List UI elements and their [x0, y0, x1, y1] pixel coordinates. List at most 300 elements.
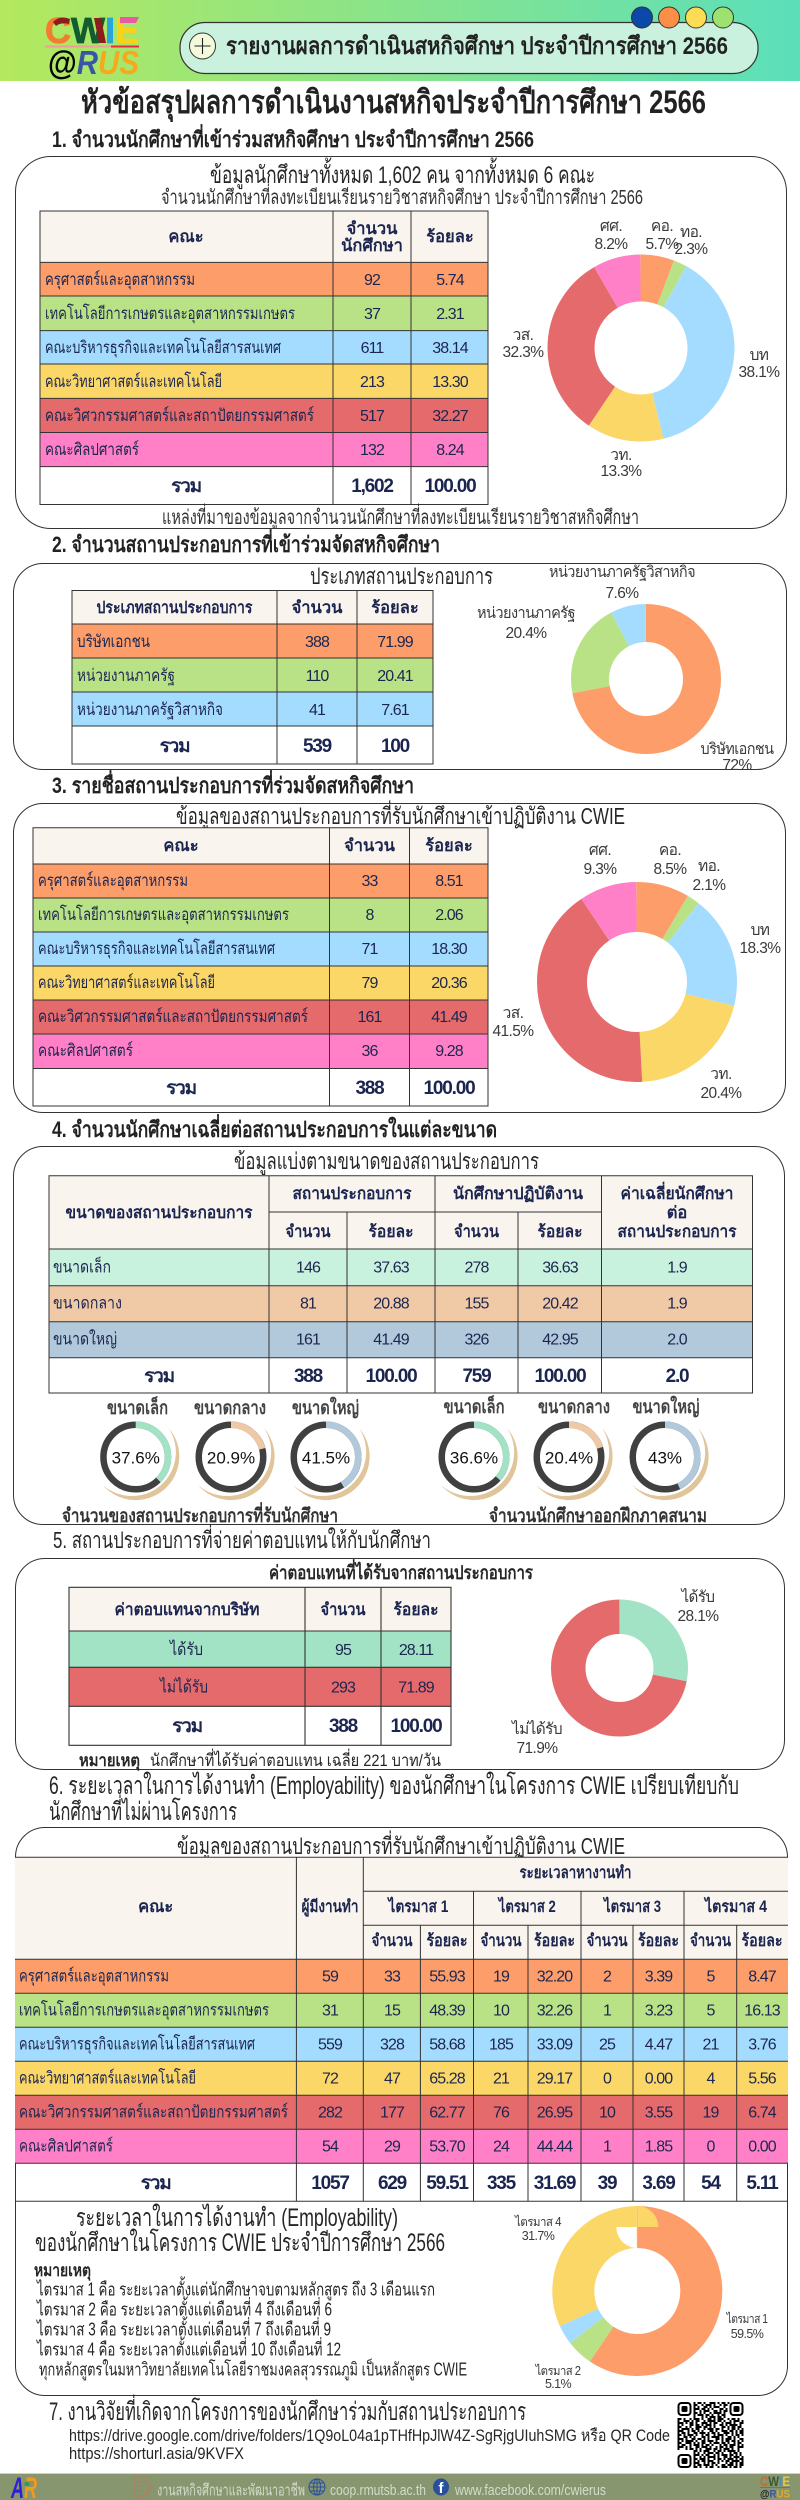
row: 155	[464, 1296, 489, 1312]
row: 132	[360, 442, 385, 459]
footer bar	[0, 2472, 800, 2500]
donut labels: ไตรมาส 4	[514, 2215, 562, 2229]
row: 3.76	[748, 2036, 777, 2054]
gauge: workplaces medium: ขนาดกลาง	[194, 1398, 266, 1419]
donut chart: workplaces by faculty	[562, 907, 712, 1057]
table: employability	[15, 1857, 788, 2201]
employability heading: ของนักศึกษาในโครงการ CWIE ประจำปีการศึกษา 2566	[35, 2228, 445, 2257]
table header: ร้อยละ	[394, 1601, 438, 1619]
table header: ร้อยละ	[534, 1932, 575, 1950]
table header	[96, 599, 419, 617]
row	[38, 938, 468, 959]
donut labels: 18.3%	[740, 940, 781, 957]
footer text: facebook: www.facebook.com/cwierus	[454, 2482, 606, 2499]
total row: 59.51	[426, 2173, 469, 2194]
donut labels: 38.1%	[739, 364, 780, 381]
row: 32.20	[537, 1968, 573, 1986]
heading 6	[49, 1771, 739, 1826]
employability heading	[35, 2203, 445, 2257]
row: 10	[599, 2104, 616, 2122]
gauge: students medium	[536, 1397, 613, 1500]
row: 3.39	[645, 1968, 673, 1986]
table header: จำนวน	[586, 1932, 628, 1950]
row: 282	[318, 2104, 343, 2122]
donut labels: วท.	[710, 1066, 732, 1083]
total row	[144, 1366, 689, 1387]
row: คณะวิทยาศาสตร์และเทคโนโลยี	[19, 2068, 196, 2088]
row: 388	[305, 634, 330, 651]
row: 36.63	[542, 1260, 579, 1276]
row: 55.93	[429, 1968, 466, 1986]
row: 72	[322, 2070, 339, 2088]
total row: 54	[701, 2173, 721, 2194]
row: 328	[380, 2036, 405, 2054]
row: 3.55	[645, 2104, 673, 2122]
table header: คณะ	[138, 1898, 173, 1916]
row: เทคโนโลยีการเกษตรและอุตสาหกรรมเกษตร	[45, 303, 295, 324]
row: 326	[464, 1332, 489, 1348]
table header: จำนวน	[344, 837, 396, 855]
table header: จำนวน	[480, 1932, 522, 1950]
row: 0.00	[645, 2070, 673, 2088]
table header: ขนาดของสถานประกอบการ	[66, 1204, 253, 1222]
row: คณะบริหารธุรกิจและเทคโนโลยีสารสนเทศ	[19, 2034, 255, 2054]
table header: จำนวน	[454, 1223, 500, 1241]
total row: 3.69	[642, 2173, 675, 2194]
row: คณะวิศวกรรมศาสตร์และสถาปัตยกรรมศาสตร์	[38, 1007, 308, 1026]
donut labels	[510, 1588, 719, 1757]
total row	[141, 2173, 779, 2194]
row: 20.88	[373, 1296, 410, 1312]
panel 4: students per workplace size	[13, 1146, 785, 1525]
row: 65.28	[429, 2070, 466, 2088]
row: ขนาดเล็ก	[53, 1256, 111, 1276]
donut labels: 59.5%	[731, 2327, 764, 2341]
gauge: workplaces large	[292, 1396, 370, 1500]
donut labels: 71.9%	[517, 1740, 558, 1757]
total row: 100	[381, 736, 410, 757]
panel 6: employability	[15, 1827, 788, 2396]
decorative dots	[632, 7, 734, 28]
row: 33	[384, 1968, 401, 1986]
table header	[66, 1181, 737, 1241]
row: 71	[362, 941, 378, 958]
row: 293	[331, 1680, 356, 1696]
table: workplace types	[72, 590, 433, 764]
row: 8.24	[436, 442, 465, 459]
table header: ผู้มีงานทำ	[302, 1897, 358, 1918]
total row: 100.00	[425, 476, 476, 497]
row: 13.30	[432, 374, 469, 391]
donut labels: ไม่ได้รับ	[510, 1720, 562, 1738]
row: ขนาดใหญ่	[53, 1328, 117, 1348]
row: 185	[489, 2036, 514, 2054]
row: 161	[358, 1009, 382, 1026]
row: 1	[603, 2138, 612, 2156]
donut labels: บท	[750, 347, 769, 364]
row: 21	[702, 2036, 719, 2054]
total row	[172, 1716, 442, 1737]
panel 1 heading: ข้อมูลนักศึกษาทั้งหมด 1,602 คน จากทั้งหมด 6 คณะ	[210, 157, 595, 190]
total row: 2.0	[666, 1366, 689, 1387]
row: 8.47	[748, 1968, 777, 1986]
row: คณะศิลปศาสตร์	[19, 2136, 113, 2156]
row: 42.95	[542, 1332, 579, 1348]
gauge: students medium: 20.4%	[545, 1448, 593, 1468]
total row: 100.00	[366, 1366, 417, 1387]
row: คณะวิทยาศาสตร์และเทคโนโลยี	[45, 371, 222, 391]
donut labels: 28.1%	[678, 1608, 719, 1625]
row: 37.63	[373, 1260, 410, 1276]
row: 18.30	[431, 941, 468, 958]
row	[53, 1294, 688, 1312]
panel 1: students by faculty	[15, 156, 787, 529]
title pill	[180, 22, 758, 74]
donut labels: ศศ.	[600, 218, 622, 235]
donut labels: 5.7%	[646, 236, 679, 253]
row: 0.00	[748, 2138, 777, 2156]
row: 1.85	[645, 2138, 673, 2156]
donut chart: employability by quarter	[573, 2227, 701, 2355]
total row: รวม	[171, 476, 202, 497]
icon: plus circle	[190, 33, 216, 59]
row	[38, 871, 464, 891]
note: หมายเหตุ	[79, 1751, 140, 1771]
panel 3 heading: ข้อมูลของสถานประกอบการที่รับนักศึกษาเข้าปฏิบัติงาน CWIE	[176, 800, 625, 830]
quarter notes: ไตรมาส 4 คือ ระยะเวลาตั้งแต่เดือนที่ 10 ถึงเดือนที่ 12	[36, 2336, 341, 2360]
table header: จำนวน	[347, 220, 398, 238]
quarter notes: หมายเหตุ	[34, 2261, 91, 2281]
total row: 100.00	[391, 1716, 442, 1737]
gauge: students small: 36.6%	[450, 1448, 498, 1468]
row	[53, 1328, 688, 1348]
table header: จำนวน	[292, 599, 343, 617]
row: 5	[706, 1968, 716, 1986]
table header: ไตรมาส 4	[703, 1896, 768, 1916]
row: 92	[364, 272, 381, 289]
total row: รวม	[166, 1078, 197, 1099]
donut labels: ไตรมาส 2	[535, 2364, 581, 2378]
row: 33	[362, 873, 378, 890]
row: 58.68	[429, 2036, 466, 2054]
row	[77, 632, 414, 651]
row: 25	[599, 2036, 616, 2054]
table header: ร้อยละ	[426, 1932, 468, 1950]
row: คณะวิศวกรรมศาสตร์และสถาปัตยกรรมศาสตร์	[19, 2102, 288, 2122]
quarter notes	[34, 2261, 467, 2380]
table header	[114, 1600, 438, 1619]
logo: CWIE @RUS: @RUS	[48, 44, 139, 81]
panel 2: workplace types	[13, 563, 787, 770]
table header: ประเภทสถานประกอบการ	[96, 599, 253, 617]
header banner	[0, 0, 800, 81]
heading 1: 1. จำนวนนักศึกษาที่เข้าร่วมสหกิจศึกษา ประจำปีการศึกษา 2566	[52, 123, 534, 152]
row: 1.9	[667, 1296, 688, 1312]
row: ได้รับ	[168, 1639, 203, 1659]
row: 32.26	[537, 2002, 573, 2020]
donut labels: 41.5%	[493, 1023, 534, 1040]
total row: 100.00	[535, 1366, 586, 1387]
row: 9.28	[435, 1043, 464, 1060]
donut labels: ทอ.	[698, 858, 720, 875]
table: by workplace size	[49, 1176, 752, 1393]
row: คณะบริหารธุรกิจและเทคโนโลยีสารสนเทศ	[45, 337, 281, 358]
row	[19, 2136, 777, 2156]
row: 278	[464, 1260, 489, 1276]
donut labels: บริษัทเอกชน	[700, 741, 774, 758]
row: 517	[360, 408, 385, 425]
icon: globe	[309, 2479, 325, 2495]
row	[19, 2000, 781, 2020]
row: 3.23	[645, 2002, 673, 2020]
row: 6.74	[748, 2104, 777, 2122]
donut labels: หน่วยงานภาครัฐ	[477, 605, 575, 622]
table header: นักศึกษา	[341, 236, 403, 255]
total row: 100.00	[424, 1078, 475, 1099]
donut labels: 5.1%	[545, 2377, 572, 2391]
total row: 629	[378, 2173, 407, 2194]
panel 4 heading: ข้อมูลแบ่งตามขนาดของสถานประกอบการ	[234, 1148, 539, 1175]
row: 146	[296, 1260, 321, 1276]
icon: document and pen	[134, 2477, 152, 2498]
gauge: workplaces small: 37.6%	[112, 1448, 160, 1468]
research links: https://drive.google.com/drive/folders/1Q9oL04a1pTHfHpJlW4Z-SgRjgUIuhSMG หรือ QR Code	[69, 2427, 670, 2445]
gauge: students large: 43%	[648, 1448, 682, 1468]
total row: 388	[294, 1366, 323, 1387]
row: 26.95	[537, 2104, 573, 2122]
donut labels: 8.2%	[595, 236, 628, 253]
heading 6: นักศึกษาที่ไม่ผ่านโครงการ	[49, 1794, 237, 1826]
row: 0	[603, 2070, 612, 2088]
gauge caption left: จำนวนของสถานประกอบการที่รับนักศึกษา	[62, 1502, 338, 1527]
donut labels: ได้รับ	[680, 1588, 714, 1606]
logo: CWIE @RUS: CWIE	[45, 10, 139, 51]
row: 53.70	[429, 2138, 466, 2156]
donut labels: หน่วยงานภาครัฐวิสาหกิจ	[549, 564, 695, 581]
table: compensation	[69, 1587, 451, 1745]
table header: ร้อยละ	[742, 1932, 782, 1950]
panel 6 heading: ข้อมูลของสถานประกอบการที่รับนักศึกษาเข้าปฏิบัติงาน CWIE	[177, 1830, 625, 1860]
table header: ร้อยละ	[426, 228, 474, 246]
heading 7: 7. งานวิจัยที่เกิดจากโครงการของนักศึกษาร่วมกับสถานประกอบการ	[49, 2394, 526, 2426]
row: 79	[362, 975, 378, 992]
row: คณะวิศวกรรมศาสตร์และสถาปัตยกรรมศาสตร์	[45, 406, 314, 425]
pill title text: รายงานผลการดำเนินสหกิจศึกษา ประจำปีการศึกษา 2566	[226, 33, 728, 60]
table header: ค่าเฉลี่ยนักศึกษา	[620, 1181, 734, 1203]
row: 8.51	[435, 873, 464, 890]
donut labels: คอ.	[659, 842, 681, 859]
row: 16.13	[744, 2002, 781, 2020]
row: 4	[706, 2070, 716, 2088]
total row	[171, 476, 476, 497]
row: 48.39	[429, 2002, 466, 2020]
donut labels: ไตรมาส 1	[726, 2312, 768, 2326]
donut labels	[493, 842, 781, 1102]
row: 32.27	[432, 408, 469, 425]
row	[45, 270, 465, 290]
panel 3: participating workplaces by faculty	[13, 803, 786, 1113]
gauge: workplaces small	[103, 1395, 179, 1500]
total row: 1,602	[351, 476, 393, 497]
quarter notes: ไตรมาส 3 คือ ระยะเวลาตั้งแต่เดือนที่ 7 ถึงเดือนที่ 9	[36, 2316, 331, 2340]
row	[45, 337, 469, 358]
row	[19, 2102, 777, 2122]
row: 62.77	[429, 2104, 466, 2122]
gauge: students medium: ขนาดกลาง	[538, 1397, 610, 1418]
row: ไม่ได้รับ	[158, 1676, 208, 1696]
table header: ไตรมาส 1	[387, 1896, 448, 1916]
row: 559	[318, 2036, 343, 2054]
row: ครุศาสตร์และอุตสาหกรรม	[45, 270, 195, 290]
row: 71.99	[377, 634, 414, 651]
panel 2 heading: ประเภทสถานประกอบการ	[310, 563, 493, 589]
donut labels	[514, 2215, 768, 2391]
row: 5	[706, 2002, 716, 2020]
gauge: workplaces small: ขนาดเล็ก	[107, 1395, 168, 1419]
total row: รวม	[141, 2173, 171, 2194]
row: 5.56	[748, 2070, 777, 2088]
total row: 335	[487, 2173, 517, 2194]
donut labels: 20.4%	[701, 1085, 742, 1102]
table header: นักศึกษาปฏิบัติงาน	[453, 1184, 584, 1203]
row: 1.9	[667, 1260, 688, 1276]
total row: 1057	[311, 2173, 349, 2194]
panel 5 heading: ค่าตอบแทนที่ได้รับจากสถานประกอบการ	[269, 1559, 534, 1584]
row: หน่วยงานภาครัฐวิสาหกิจ	[77, 700, 223, 720]
row: 36	[362, 1043, 378, 1060]
row: 31	[322, 2002, 339, 2020]
row	[168, 1639, 434, 1659]
gauge: workplaces medium	[194, 1398, 275, 1500]
total row: 5.11	[746, 2173, 779, 2194]
row: 1	[603, 2002, 612, 2020]
total row: รวม	[144, 1366, 175, 1387]
table header: ต่อ	[667, 1204, 687, 1222]
heading 3: 3. รายชื่อสถานประกอบการที่ร่วมจัดสหกิจศึกษา	[52, 769, 414, 798]
row: 33.09	[537, 2036, 573, 2054]
row: 10	[493, 2002, 510, 2020]
table header: ไตรมาส 2	[497, 1896, 556, 1916]
research links	[69, 2427, 670, 2463]
total row: 31.69	[534, 2173, 576, 2194]
gauge: students small: ขนาดเล็ก	[444, 1394, 504, 1418]
row: 15	[384, 2002, 401, 2020]
row: 2	[603, 1968, 612, 1986]
table header: ค่าตอบแทนจากบริษัท	[114, 1600, 260, 1619]
total row: 388	[329, 1716, 358, 1737]
row: 2.31	[436, 306, 465, 323]
table header: คณะ	[163, 837, 199, 855]
logo: CWIE @RUS	[45, 10, 139, 81]
table header: ร้อยละ	[368, 1223, 414, 1241]
row: 28.11	[399, 1642, 434, 1659]
row	[19, 1966, 777, 1986]
total row: 39	[598, 2173, 617, 2194]
donut labels: วส.	[513, 327, 533, 344]
row: 2.0	[667, 1332, 688, 1348]
row: 4.47	[645, 2036, 673, 2054]
donut labels: วส.	[503, 1005, 523, 1022]
donut chart: compensation	[568, 1617, 671, 1719]
row	[45, 440, 465, 459]
donut labels: 9.3%	[584, 861, 617, 878]
donut labels: 32.3%	[503, 344, 544, 361]
gauge: workplaces large: ขนาดใหญ่	[292, 1396, 359, 1419]
row: 161	[296, 1332, 321, 1348]
donut labels	[503, 218, 780, 480]
quarter notes: ทุกหลักสูตรในมหาวิทยาลัยเทคโนโลยีราชมงคลสุวรรณภูมิ เป็นหลักสูตร CWIE	[39, 2358, 467, 2380]
donut labels	[477, 564, 774, 774]
donut chart: workplace types	[590, 623, 702, 735]
total row	[166, 1078, 475, 1099]
heading 4: 4. จำนวนนักศึกษาเฉลี่ยต่อสถานประกอบการในแต่ละขนาด	[52, 1113, 497, 1142]
table header: จำนวน	[372, 1932, 413, 1950]
row	[158, 1676, 435, 1696]
row: 95	[335, 1642, 352, 1659]
row: 81	[300, 1296, 317, 1312]
table header: จำนวน	[320, 1601, 366, 1619]
row	[45, 371, 469, 391]
row: 54	[322, 2138, 339, 2156]
row: 20.41	[377, 668, 414, 685]
table: students by faculty	[40, 211, 488, 504]
row: 2.06	[435, 907, 464, 924]
donut labels: ศศ.	[589, 842, 611, 859]
row: 24	[493, 2138, 510, 2156]
panel 5: compensation	[15, 1558, 785, 1770]
table header: คณะ	[168, 228, 204, 246]
donut labels: 72%	[722, 757, 752, 774]
row	[38, 1041, 464, 1060]
gauge: workplaces large: 41.5%	[302, 1448, 350, 1468]
row: 19	[493, 1968, 510, 1986]
row	[38, 904, 464, 925]
total row: 759	[462, 1366, 491, 1387]
total row: รวม	[160, 736, 190, 757]
heading 2: 2. จำนวนสถานประกอบการที่เข้าร่วมจัดสหกิจศึกษา	[52, 528, 440, 557]
table: workplaces by faculty	[33, 828, 488, 1106]
row: คณะศิลปศาสตร์	[45, 440, 139, 459]
row: 0	[706, 2138, 716, 2156]
row: 29	[384, 2138, 401, 2156]
gauge: students large	[632, 1395, 709, 1500]
row: คณะวิทยาศาสตร์และเทคโนโลยี	[38, 972, 215, 992]
row	[19, 2068, 777, 2088]
small CWIE logo	[760, 2473, 790, 2500]
quarter notes: ไตรมาส 2 คือ ระยะเวลาตั้งแต่เดือนที่ 4 ถึงเดือนที่ 6	[35, 2296, 332, 2320]
row: ขนาดกลาง	[53, 1294, 122, 1312]
table header: จำนวน	[286, 1223, 331, 1241]
row: คณะศิลปศาสตร์	[38, 1041, 133, 1060]
row: ครุศาสตร์และอุตสาหกรรม	[38, 871, 188, 891]
heading 5: 5. สถานประกอบการที่จ่ายค่าตอบแทนให้กับนักศึกษา	[53, 1524, 431, 1553]
row: 213	[360, 374, 385, 391]
employability heading: ระยะเวลาในการได้งานทำ (Employability)	[76, 2203, 398, 2232]
research links: https://shorturl.asia/9KVFX	[69, 2445, 244, 2463]
row: ครุศาสตร์และอุตสาหกรรม	[19, 1966, 169, 1986]
table header: สถานประกอบการ	[618, 1223, 737, 1241]
row: 76	[493, 2104, 510, 2122]
row: เทคโนโลยีการเกษตรและอุตสาหกรรมเกษตร	[38, 904, 289, 925]
footer text: office: งานสหกิจศึกษาและพัฒนาอาชีพ	[157, 2482, 305, 2500]
row: หน่วยงานภาครัฐ	[77, 666, 175, 686]
table header: จำนวน	[690, 1932, 732, 1950]
table header: ร้อยละ	[638, 1932, 679, 1950]
row: 5.74	[436, 272, 465, 289]
donut labels: 8.5%	[654, 861, 687, 878]
table header: ไตรมาส 3	[602, 1896, 661, 1916]
donut labels: คอ.	[651, 218, 673, 235]
